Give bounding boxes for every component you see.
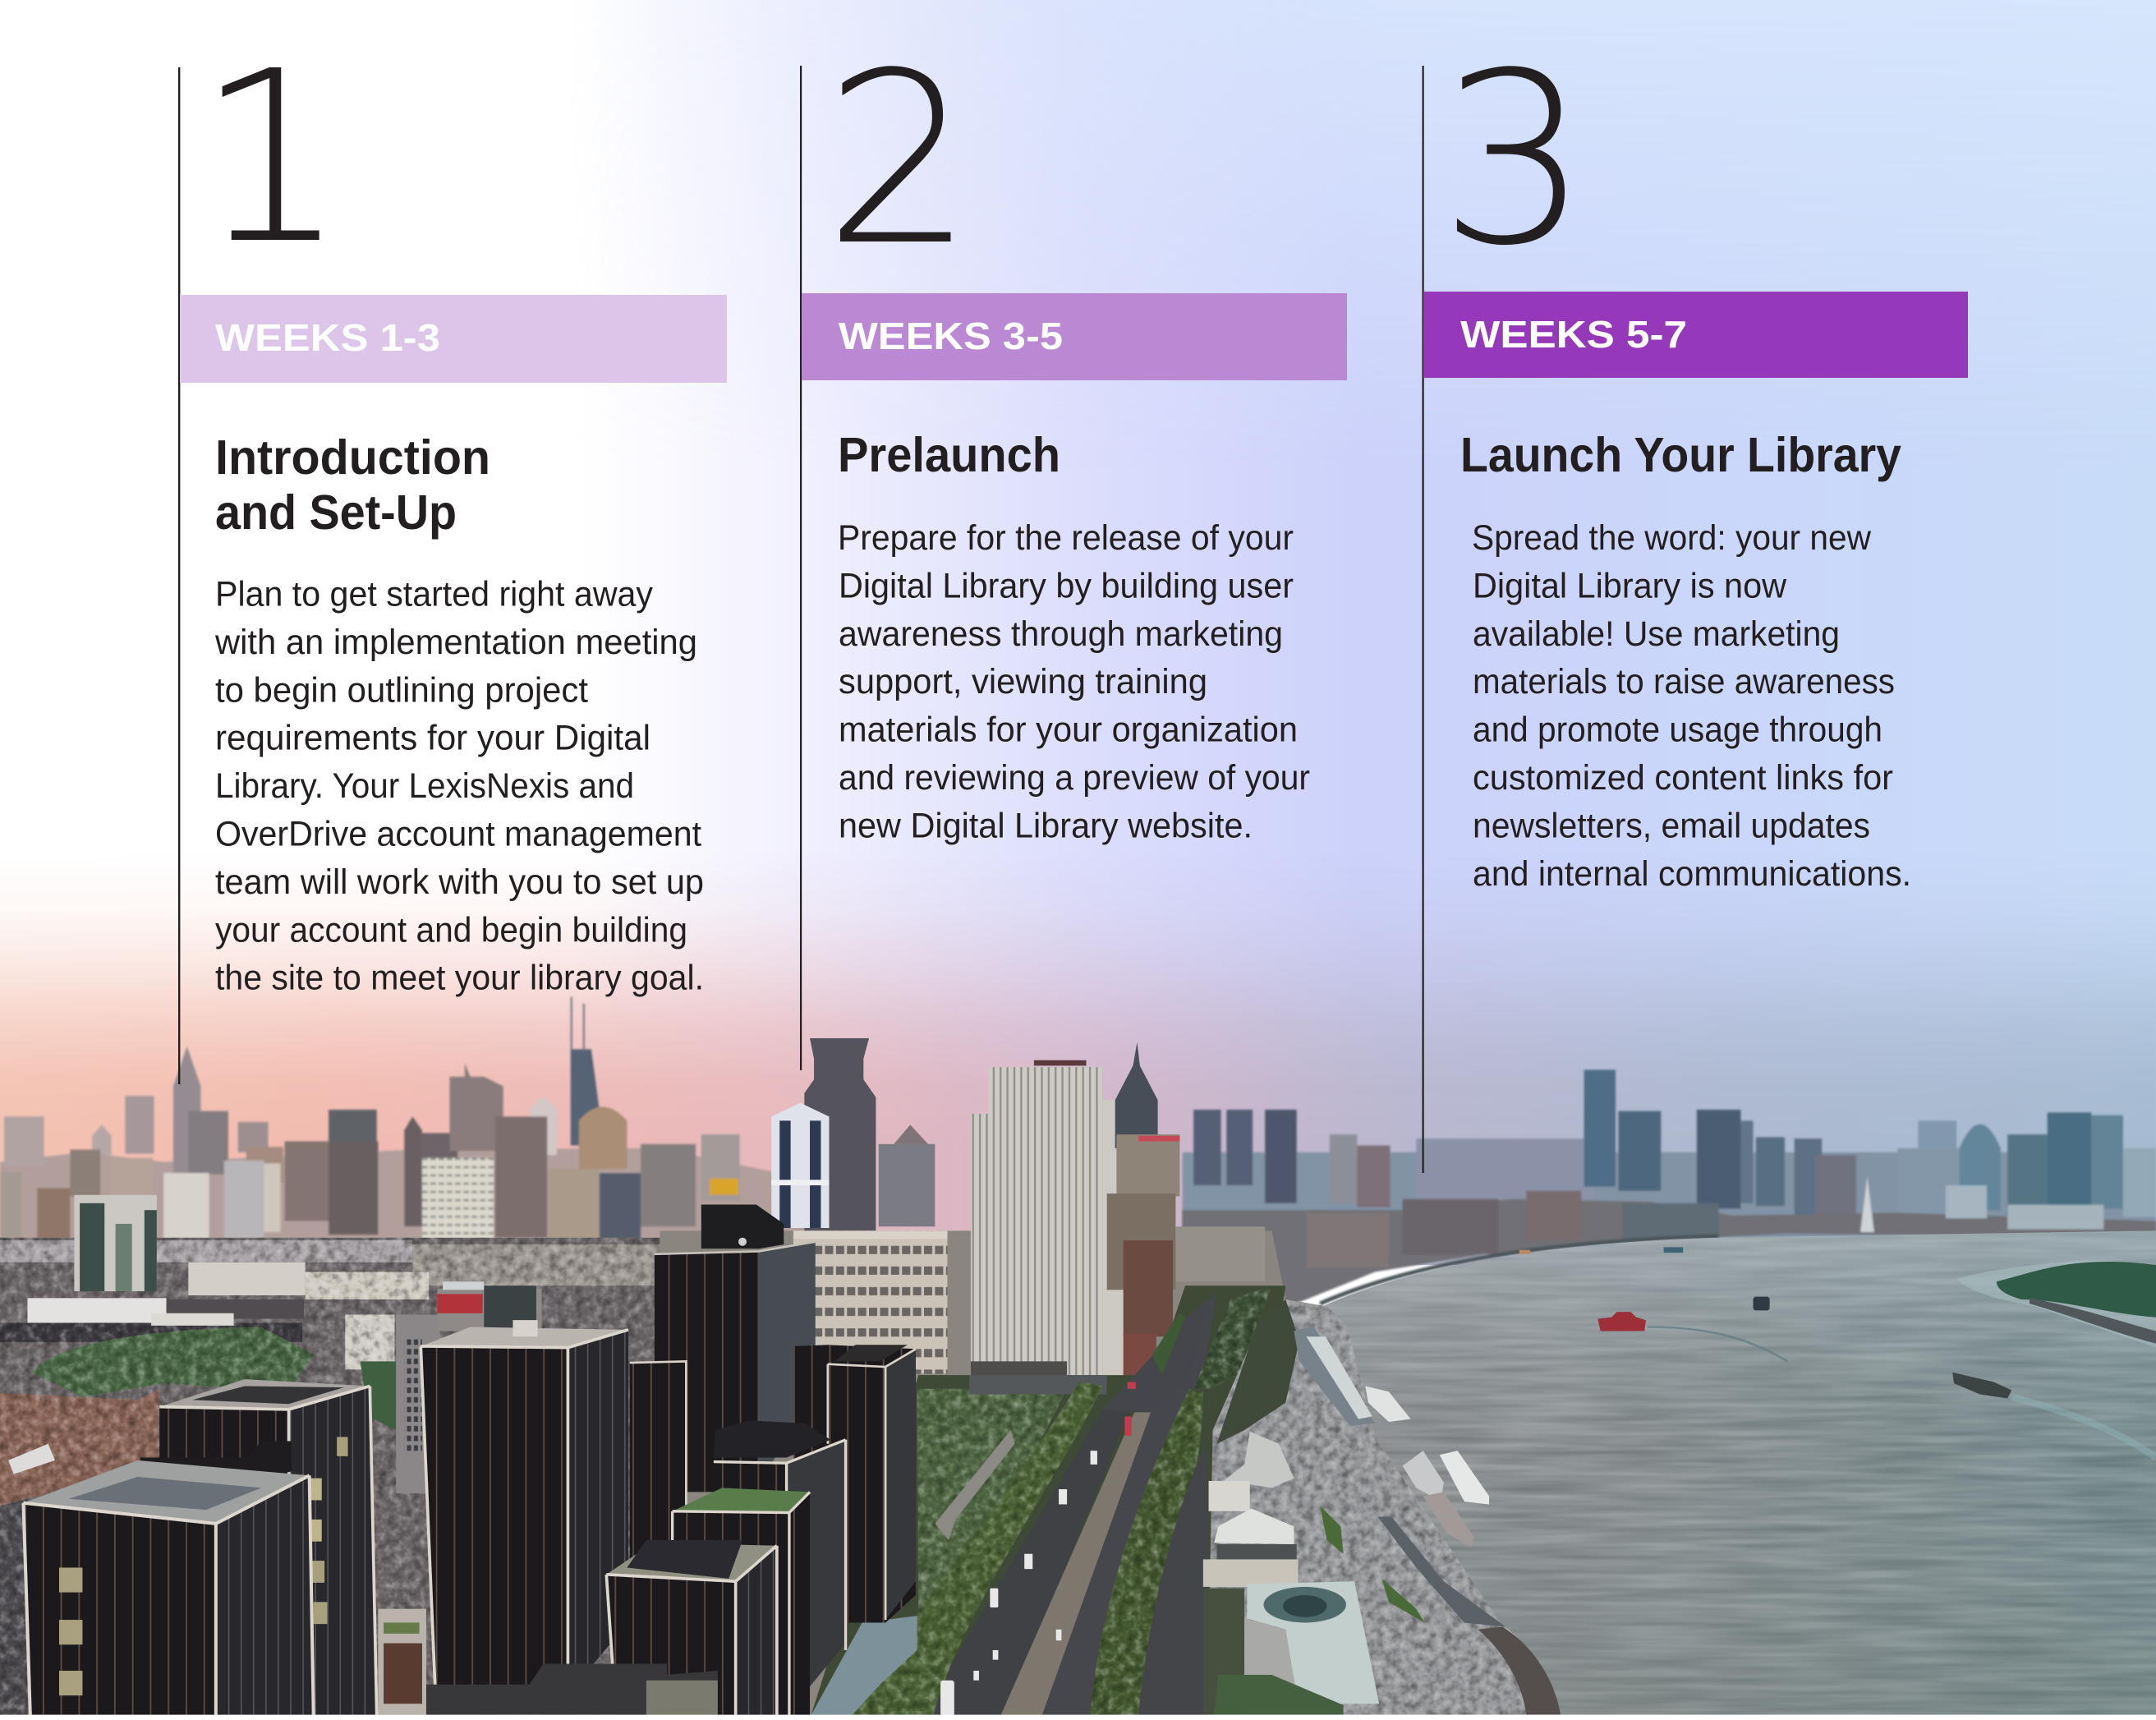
lane marks and cars — [940, 1451, 1097, 1716]
lawns — [1320, 1506, 1344, 1554]
panel: step 2 prelaunch — [802, 22, 1347, 845]
step number 1: 1 — [196, 21, 347, 296]
body text 1: requirements for your Digital — [215, 719, 650, 758]
column 1 divider line — [178, 67, 180, 1084]
median — [1001, 1412, 1151, 1715]
body text 1: to begin outlining project — [215, 670, 588, 710]
body text 1: Plan to get started right away — [215, 575, 653, 614]
trees right of road — [1091, 1389, 1203, 1715]
ground under road — [811, 1285, 1285, 1715]
panel: step 3 launch your library — [1423, 22, 1968, 894]
body text 3: available! Use marketing — [1473, 614, 1840, 654]
bund waterfront buildings — [1183, 1175, 2156, 1320]
boats — [1519, 1247, 2011, 1399]
panel: step 1 introduction and set-up — [180, 21, 727, 998]
week banner 2 — [802, 293, 1347, 380]
step number 2: 2 — [824, 22, 974, 297]
body text 1: team will work with you to set up — [215, 862, 704, 902]
waterfront promenade — [1203, 1299, 1561, 1715]
body text 2: materials for your organization — [839, 711, 1298, 750]
garden at foot of pavilion — [1214, 1675, 1344, 1715]
week banner 2: WEEKS 3-5 — [839, 315, 1063, 357]
heading 2: Prelaunch — [838, 428, 1060, 482]
glass funnel building — [1247, 1581, 1379, 1704]
sky gradient — [0, 0, 2156, 1265]
column 2 divider line — [800, 66, 802, 1070]
week banner 3: WEEKS 5-7 — [1460, 313, 1687, 356]
front low tower — [606, 1540, 777, 1715]
old town ground — [0, 1195, 660, 1719]
body text 2 — [838, 518, 1310, 845]
carriageway left — [922, 1410, 1130, 1715]
body text 3 — [1472, 518, 1911, 894]
tower with roof garden — [673, 1420, 846, 1715]
trees left of road — [853, 1382, 1103, 1715]
grey office with red sign — [396, 1281, 542, 1493]
white tent — [1214, 1508, 1294, 1544]
island on far right — [1956, 1260, 2156, 1348]
small roof terrace building — [378, 1609, 426, 1715]
column 3 divider line — [1423, 66, 1424, 1173]
body text 3: and promote usage through — [1473, 711, 1882, 750]
body text 1: the site to meet your library goal. — [215, 959, 704, 998]
river — [1322, 1230, 2156, 1715]
body text 3: Spread the word: your new — [1472, 518, 1872, 558]
body text 2: awareness through marketing — [839, 614, 1283, 654]
body text 1: Library. Your LexisNexis and — [215, 766, 634, 806]
heading 1: Introduction — [215, 430, 490, 485]
body text 1 — [214, 575, 704, 998]
footpath — [1138, 1444, 1210, 1715]
heading 1: and Set-Up — [215, 485, 457, 540]
body text 3: materials to raise awareness — [1473, 662, 1895, 701]
right tower behind — [793, 1345, 916, 1622]
teal office block — [74, 1195, 157, 1291]
left front tower — [23, 1460, 314, 1715]
heading 1 — [215, 430, 490, 540]
body text 2: new Digital Library website. — [839, 806, 1253, 845]
centre right low tower — [630, 1361, 686, 1595]
city underlay behind central blocks — [660, 1230, 1285, 1719]
clock tower and tan buildings — [1107, 1042, 1265, 1386]
glass courtyard base — [811, 1616, 917, 1715]
body text 3: customized content links for — [1473, 758, 1893, 798]
glass canopy pavilion — [1210, 1432, 1294, 1492]
stair block between left towers — [140, 1441, 292, 1488]
left back tower — [159, 1379, 377, 1715]
riverside park — [917, 1389, 1065, 1616]
step number 3: 3 — [1439, 22, 1589, 297]
body text 1: your account and begin building — [215, 910, 687, 950]
centre tall tower — [421, 1320, 628, 1705]
large cream tower — [971, 1060, 1124, 1389]
body text 3: Digital Library is now — [1473, 566, 1787, 605]
docked ships — [1294, 1326, 1506, 1626]
boat wakes — [1648, 1327, 1787, 1361]
background towers centre — [771, 1038, 947, 1373]
road and trees — [811, 1285, 1285, 1716]
far skyline right bank — [1183, 1069, 2156, 1238]
carriageway right — [1042, 1293, 1217, 1715]
foreground low roofs — [426, 1664, 718, 1715]
body text 3: and internal communications. — [1473, 854, 1911, 894]
week banner 1: WEEKS 1-3 — [215, 316, 440, 359]
body text 2: and reviewing a preview of your — [839, 758, 1310, 798]
left skyline in haze — [0, 997, 825, 1306]
week banner 1 — [180, 295, 727, 383]
body text 1: with an implementation meeting — [214, 623, 697, 662]
week banner 3 — [1423, 292, 1968, 378]
heading 3: Launch Your Library — [1460, 428, 1901, 482]
dark tower behind left — [655, 1205, 816, 1492]
body text 2: support, viewing training — [839, 662, 1207, 701]
body text 3: newsletters, email updates — [1473, 806, 1870, 845]
body text 1: OverDrive account management — [215, 815, 701, 854]
body text 2: Digital Library by building user — [839, 566, 1294, 605]
body text 2: Prepare for the release of your — [838, 518, 1294, 558]
